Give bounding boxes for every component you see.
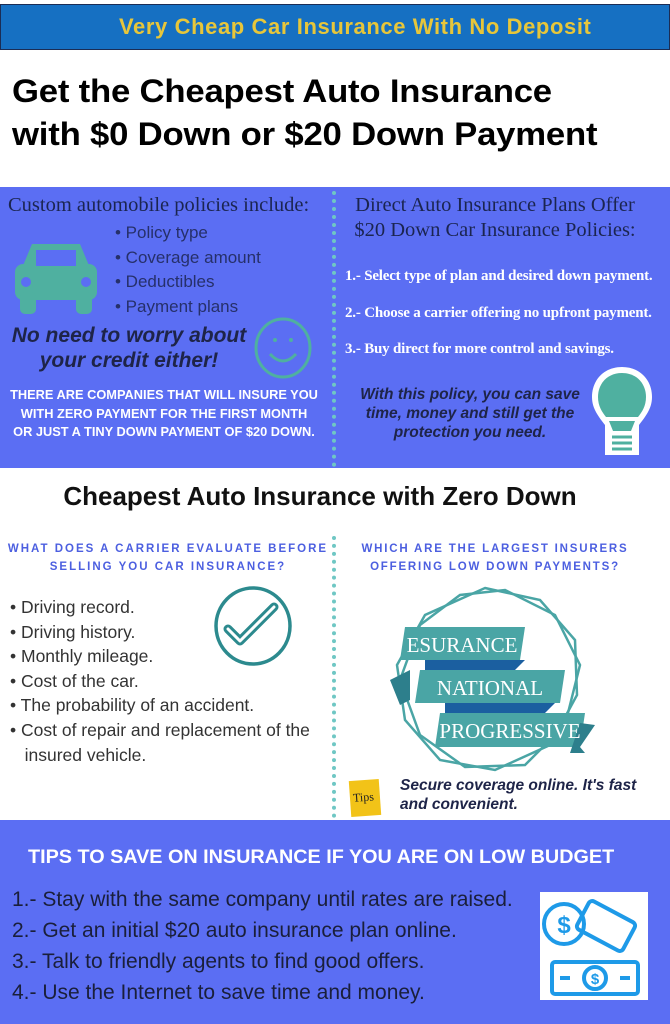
main title: with $0 Down or $20 Down Payment — [12, 116, 597, 152]
caps statement: OR JUST A TINY DOWN PAYMENT OF $20 DOWN. — [13, 424, 315, 439]
main title — [12, 73, 598, 152]
tips heading: TIPS TO SAVE ON INSURANCE IF YOU ARE ON LOW BUDGET — [28, 846, 614, 868]
tips list — [12, 888, 513, 1004]
tips list: 4.- Use the Internet to save time and money. — [12, 981, 425, 1004]
credit note: your credit either! — [40, 349, 218, 372]
credit note: No need to worry about — [12, 324, 246, 347]
evaluation list: insured vehicle. — [25, 745, 146, 765]
left heading: SELLING YOU CAR INSURANCE? — [50, 561, 286, 573]
divider — [332, 191, 336, 467]
right heading — [354, 194, 636, 241]
bullet list: • Payment plans — [115, 296, 238, 316]
divider — [332, 536, 336, 818]
evaluation list: • Cost of repair and replacement of the — [10, 720, 310, 740]
main title: Get the Cheapest Auto Insurance — [12, 73, 552, 109]
icon: money — [540, 892, 648, 1000]
credit note — [12, 324, 247, 372]
badge: insurers: NATIONAL — [437, 676, 543, 700]
right heading: Direct Auto Insurance Plans Offer — [355, 194, 635, 216]
bullet list: • Deductibles — [115, 272, 215, 291]
icon: check circle — [214, 586, 292, 666]
right heading — [362, 543, 628, 573]
evaluation list: • Cost of the car. — [10, 671, 139, 691]
badge: insurers — [390, 586, 595, 772]
caps statement: THERE ARE COMPANIES THAT WILL INSURE YOU — [10, 387, 318, 402]
steps — [345, 268, 652, 357]
evaluation list: • The probability of an accident. — [10, 695, 254, 715]
evaluation list: • Driving record. — [10, 597, 135, 617]
icon: money: $ — [591, 971, 600, 988]
icon: tips note: Tips — [352, 789, 374, 805]
evaluation list: • Monthly mileage. — [10, 646, 153, 666]
tips list: 3.- Talk to friendly agents to find good offers. — [12, 950, 424, 973]
italic note: time, money and still get the — [366, 405, 574, 422]
panel: blue policies — [0, 187, 670, 468]
bullet list: • Coverage amount — [115, 248, 261, 266]
tips text — [400, 777, 637, 813]
tips text: and convenient. — [400, 796, 518, 813]
banner text: Very Cheap Car Insurance With No Deposit — [119, 14, 591, 39]
caps statement: WITH ZERO PAYMENT FOR THE FIRST MONTH — [21, 406, 307, 420]
evaluation list — [10, 597, 310, 765]
steps: 3.- Buy direct for more control and savings. — [345, 341, 614, 357]
tips list: 2.- Get an initial $20 auto insurance plan online. — [12, 919, 457, 942]
icon: car — [15, 244, 97, 314]
italic note: With this policy, you can save — [360, 386, 580, 403]
steps: 2.- Choose a carrier offering no upfront payment. — [345, 304, 652, 320]
panel: carrier evaluation & insurers — [8, 536, 637, 818]
italic note — [360, 386, 580, 441]
right heading: OFFERING LOW DOWN PAYMENTS? — [370, 561, 620, 573]
right heading: $20 Down Car Insurance Policies: — [354, 219, 636, 241]
left heading: Custom automobile policies include: — [8, 194, 309, 216]
bullet list: • Policy type — [115, 223, 208, 242]
icon: smiley — [254, 318, 312, 378]
right heading: WHICH ARE THE LARGEST INSURERS — [362, 543, 628, 555]
badge: insurers: ESURANCE — [407, 633, 517, 657]
tips list: 1.- Stay with the same company until rates are raised. — [12, 888, 513, 911]
icon: money: $ — [557, 912, 571, 939]
steps: 1.- Select type of plan and desired down payment. — [345, 268, 652, 284]
tips text: Secure coverage online. It's fast — [400, 777, 636, 794]
left heading: WHAT DOES A CARRIER EVALUATE BEFORE — [8, 543, 328, 555]
evaluation list: • Driving history. — [10, 622, 135, 642]
bullet list — [115, 223, 261, 316]
italic note: protection you need. — [394, 424, 546, 441]
icon: tips note — [349, 779, 381, 817]
badge: insurers: PROGRESSIVE — [439, 719, 581, 743]
left heading — [8, 543, 328, 573]
section heading: Cheapest Auto Insurance with Zero Down — [63, 481, 577, 511]
caps statement — [10, 387, 318, 439]
panel: tips to save — [0, 820, 670, 1024]
top banner — [0, 4, 670, 50]
icon: light bulb — [592, 367, 652, 455]
